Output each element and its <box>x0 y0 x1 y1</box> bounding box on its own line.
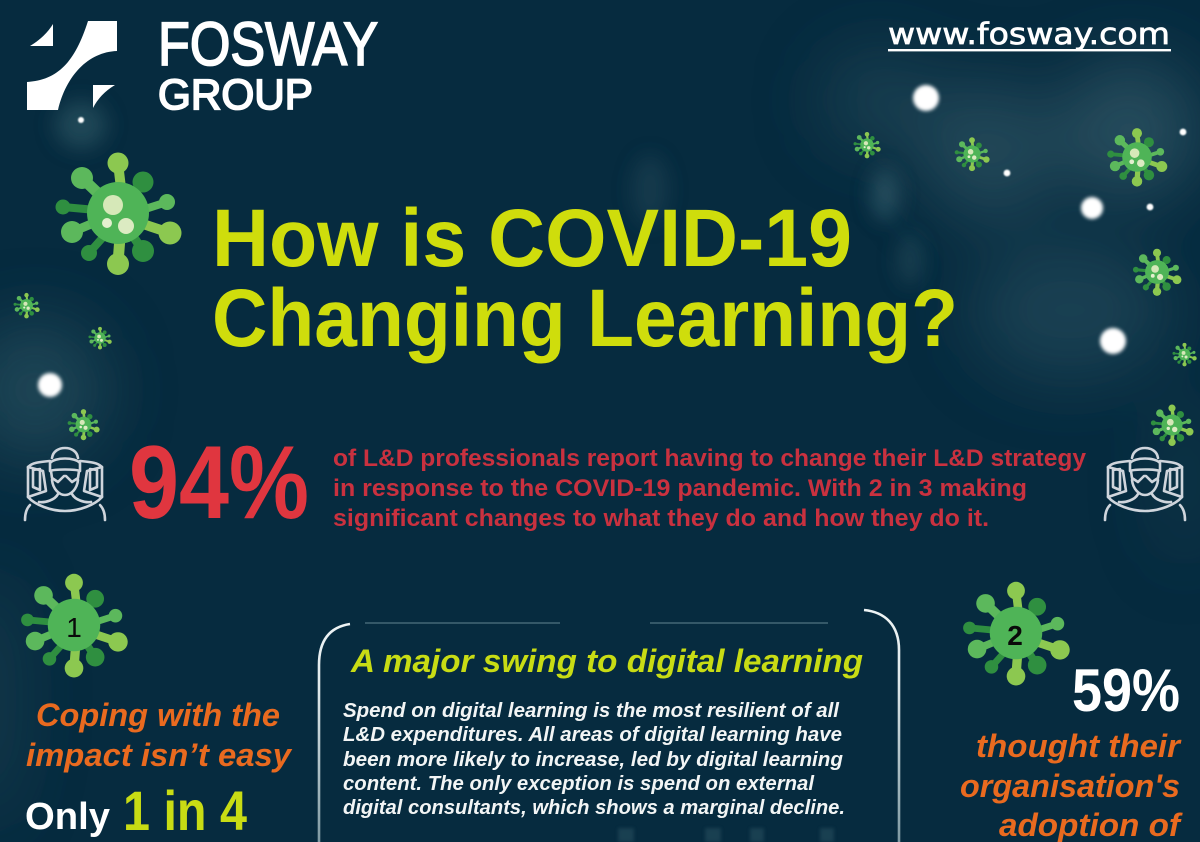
panel body text: content. The only exception is spend on external <box>343 773 814 795</box>
statistic description: of L&D professionals report having to change their L&D strategy <box>333 445 1087 472</box>
icon: VR headset left <box>25 448 105 520</box>
statistic description <box>333 445 1087 532</box>
section 1 heading <box>26 697 293 773</box>
title: How is COVID-19 <box>212 193 852 284</box>
icon: large virus <box>56 152 182 275</box>
icon: VR headset right <box>1105 448 1185 520</box>
statistic description: significant changes to what they do and how they do it. <box>333 505 989 532</box>
panel: a major swing to digital learning <box>319 610 899 842</box>
logo wordmark: GROUP <box>158 71 313 119</box>
title: Changing Learning? <box>212 273 958 364</box>
icon: virus number 2: 2 <box>1007 620 1023 651</box>
section 1 heading: Coping with the <box>36 697 280 733</box>
section 2 text: organisation's <box>960 768 1180 804</box>
section 2 text: adoption of <box>999 807 1183 842</box>
section 2 text <box>960 728 1183 842</box>
icon: virus number 1 <box>21 574 128 677</box>
logo mark <box>27 21 117 110</box>
glowing lights <box>38 85 1186 397</box>
floating virus decorations <box>14 128 1197 446</box>
section 2: organisation adoption <box>960 582 1183 842</box>
panel body text: digital consultants, which shows a marginal decline. <box>343 797 845 819</box>
icon: virus number 1: 1 <box>66 612 82 643</box>
website link: www.fosway.com <box>888 17 1170 51</box>
logo: Fosway Group <box>27 10 378 119</box>
statistic description: in response to the COVID-19 pandemic. With 2 in 3 making <box>333 475 1027 502</box>
icon: virus number 2 <box>963 582 1070 685</box>
panel body text <box>343 700 845 819</box>
section 1: coping with the impact <box>21 574 293 842</box>
faint glow strips <box>618 828 834 842</box>
section 2 text: thought their <box>976 728 1182 764</box>
panel heading: A major swing to digital learning <box>350 643 863 679</box>
panel body text: L&D expenditures. All areas of digital learning have <box>343 724 842 746</box>
panel body text: Spend on digital learning is the most resilient of all <box>343 700 839 722</box>
statistic: 94%: 94% <box>129 425 309 541</box>
panel body text: been more likely to increase, led by digital learning <box>343 749 843 771</box>
panel frame <box>319 610 899 842</box>
section 1 statistic: 1 in 4 <box>123 779 247 842</box>
title <box>212 193 958 364</box>
statistic: 59%: 59% <box>1072 657 1180 724</box>
section 1 heading: impact isn’t easy <box>26 737 293 773</box>
section 1 statistic: Only <box>25 796 110 838</box>
section 1 statistic <box>25 779 247 842</box>
logo wordmark <box>158 10 378 119</box>
logo wordmark: FOSWAY <box>158 10 378 78</box>
